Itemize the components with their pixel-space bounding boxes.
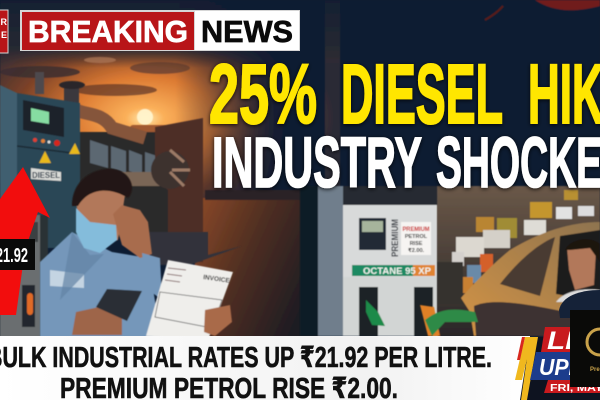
- driver window: [556, 230, 600, 302]
- pump column under cabinet: [0, 215, 47, 340]
- neck and head: [76, 181, 125, 250]
- petrol rise sign: PETROL: [405, 234, 428, 240]
- live updates badge: [515, 327, 600, 400]
- channel logo tag: R: [0, 17, 8, 27]
- diesel label: DIESEL: [32, 170, 60, 180]
- chimney in distance: [35, 72, 44, 94]
- platform: [146, 232, 242, 265]
- petrol rise sign: [401, 222, 431, 255]
- green pump handle: [425, 310, 478, 336]
- petrol rise sign: ₹2.00.: [408, 247, 425, 254]
- vertical premium text: PREMIUM: [390, 219, 400, 257]
- octane band: OCTANE 95 XP: [363, 266, 431, 276]
- invoice: INVOICE: [203, 274, 231, 285]
- pump upper panel: [343, 205, 438, 277]
- corner logo: [570, 310, 600, 387]
- headline: diesel hike: 25%: [209, 47, 317, 141]
- cabinet front: [17, 93, 80, 248]
- fuel hose and nozzle: [420, 305, 440, 336]
- green nozzle: [366, 300, 385, 326]
- breaking news banner: [20, 10, 300, 51]
- corner logo: Pre: [590, 367, 600, 373]
- fuel nozzle slot: [22, 285, 35, 327]
- buttons: [33, 138, 60, 146]
- screen: [31, 108, 49, 124]
- headline: diesel hike: [209, 47, 600, 141]
- face mask: [76, 208, 117, 253]
- invoice: [146, 260, 233, 340]
- traffic scene: [420, 186, 600, 336]
- petrol rise sign: RISE: [410, 241, 423, 247]
- shirt: [40, 232, 163, 350]
- pump lower body: [343, 277, 438, 336]
- headline: industry shocked: INDUSTRY: [212, 124, 422, 203]
- channel logo tag: E: [1, 30, 7, 40]
- gold car: [461, 222, 600, 336]
- cabinet side: [0, 85, 17, 300]
- driver face: [567, 244, 596, 290]
- exhaust pipe: [72, 104, 145, 138]
- bottom white band: [0, 336, 530, 400]
- channel logo tag: [0, 10, 8, 53]
- fuel pump: [300, 186, 438, 336]
- hair: [72, 169, 132, 206]
- radiator: [155, 118, 203, 262]
- red arrow up: [0, 167, 50, 315]
- breaking news banner: NEWS: [201, 14, 293, 49]
- car side mirror: [559, 290, 600, 318]
- hand holding invoice: [204, 305, 232, 336]
- display screen: [359, 218, 386, 250]
- calculator: [96, 289, 142, 321]
- warning triangle right: [69, 143, 80, 154]
- engine block: [80, 125, 180, 237]
- worried man: [40, 169, 233, 350]
- control panel: [23, 100, 64, 137]
- warning triangle: [39, 151, 51, 163]
- petrol rise sign: PREMIUM: [402, 227, 430, 233]
- arm and hand on forehead: [113, 205, 152, 258]
- car window: [500, 237, 555, 296]
- price label: [0, 239, 35, 270]
- generator illustration: [0, 72, 242, 340]
- hand holding calculator: [72, 302, 122, 335]
- breaking news banner: BREAKING: [28, 14, 188, 49]
